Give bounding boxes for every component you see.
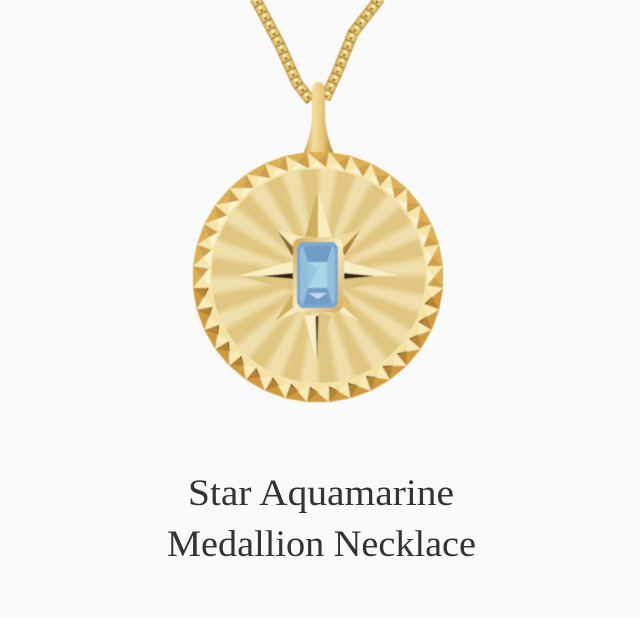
inner edge shadow: [226, 173, 411, 232]
product title: [167, 473, 476, 565]
aquamarine gem: [293, 238, 343, 312]
studded rim: [193, 152, 443, 402]
gem left shaded facet: [308, 262, 318, 288]
medallion: [193, 152, 443, 402]
title line 2: Medallion Necklace: [167, 524, 476, 565]
gem outer facets: [297, 242, 338, 308]
gem lower highlight: [308, 293, 327, 299]
right star point: [344, 261, 399, 291]
right chain: [325, 0, 380, 99]
bottom star point: [304, 315, 331, 363]
gem upper facet: [303, 246, 332, 262]
top star point: [305, 190, 332, 237]
sunburst disc: [211, 168, 426, 384]
gem step facets: [300, 246, 335, 304]
gem lower facet: [303, 288, 332, 304]
diagonal star points: [275, 230, 360, 322]
necklace pendant illustration: [193, 0, 443, 402]
eight-point star: [237, 190, 399, 363]
title line 1: Star Aquamarine: [188, 473, 454, 514]
left chain: [255, 0, 311, 101]
bail: [303, 82, 334, 154]
inner edge ring: [210, 167, 428, 385]
gem bezel: [293, 238, 343, 312]
gem table: [308, 262, 327, 288]
left star point: [237, 261, 294, 291]
